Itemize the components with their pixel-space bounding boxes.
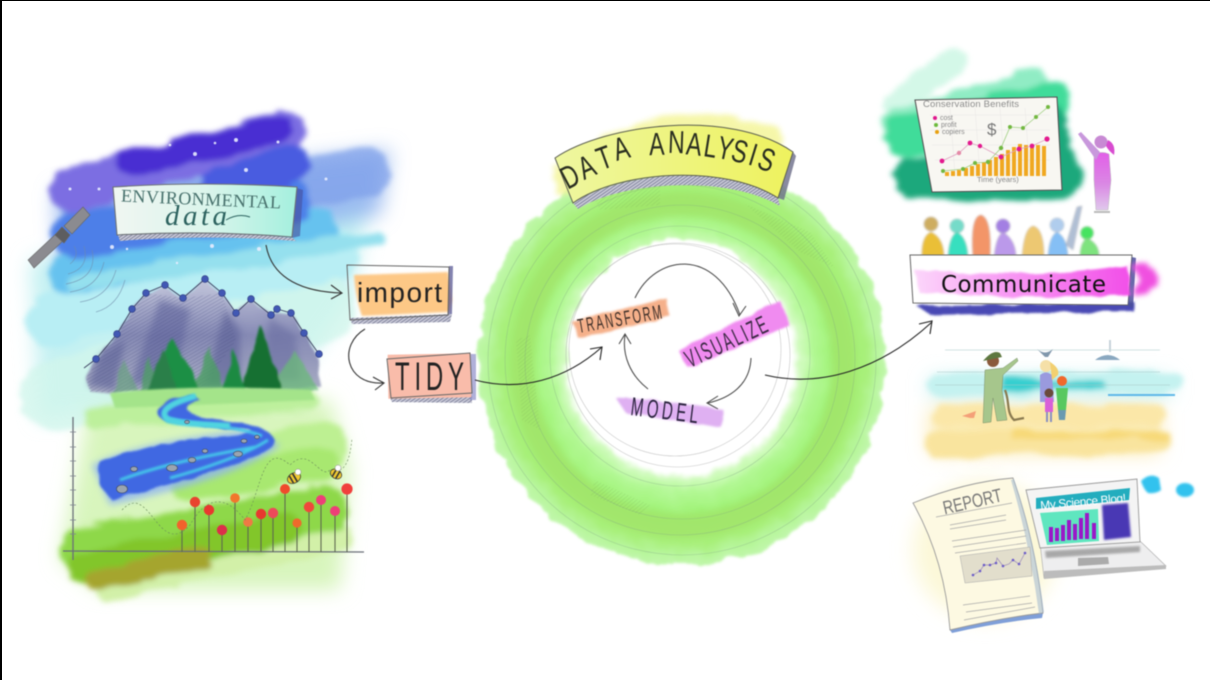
family [1040, 360, 1068, 422]
scene: beach with ranger and family [930, 340, 1175, 453]
banner lettering: A [685, 126, 704, 163]
banner: environmental data [113, 184, 303, 241]
label: model [616, 392, 722, 430]
panel: environmental data [28, 130, 476, 590]
banner: environmental data: data [165, 200, 227, 232]
banner lettering: I [745, 137, 761, 173]
legend [933, 115, 965, 136]
arrow: visualize to communicate [765, 321, 932, 379]
banner: environmental data: ENVIRONMENTAL [121, 186, 281, 213]
icon: twitter birds [1141, 476, 1194, 497]
chart axes with flower lollipop points [63, 417, 364, 560]
banner: communicate: Communicate [941, 272, 1106, 298]
stars [68, 138, 328, 264]
page frame: top edge [0, 0, 1210, 1]
document: report [913, 478, 1044, 633]
banner lettering: D [554, 157, 586, 196]
green watercolor ring [478, 157, 886, 565]
icon: satellite [28, 207, 125, 312]
lines [942, 139, 1047, 161]
label: visualize: VISUALIZE [681, 311, 774, 374]
mountains [84, 276, 322, 408]
cycle arrows [619, 264, 751, 409]
chart slide: conservation benefits: $ [987, 120, 997, 139]
sky and ground watercolor wash [30, 130, 390, 590]
icon: bees [285, 465, 343, 486]
chart slide: conservation benefits: Conservation Benefits [923, 99, 1019, 110]
banner: data analysis [552, 116, 796, 209]
banner: communicate [910, 255, 1158, 315]
presentation wash [895, 60, 1066, 178]
chart slide: conservation benefits [915, 97, 1062, 192]
trees [110, 325, 318, 408]
legend: cost [940, 115, 953, 122]
box: tidy: TIDY [395, 354, 469, 398]
bee flight path [122, 438, 352, 534]
banner lettering: N [667, 124, 685, 160]
icon: audience [922, 206, 1099, 260]
banner lettering: A [609, 129, 634, 168]
label: model: MODEL [629, 392, 703, 430]
banner lettering: A [572, 148, 601, 186]
arrow: data to import [266, 245, 342, 299]
label: transform: TRANSFORM [576, 301, 665, 338]
banner lettering: L [702, 128, 720, 165]
page frame: left edge [0, 0, 2, 680]
report yellow wash [913, 480, 1057, 620]
legend: profit [941, 122, 957, 129]
banner lettering: S [728, 132, 752, 171]
box: import: import [357, 277, 442, 308]
flower stems [182, 489, 347, 552]
legend: copiers [942, 129, 965, 136]
chart slide: conservation benefits: Time (years) [977, 175, 1019, 184]
arrow: import to tidy [349, 329, 384, 390]
panel: data analysis ring [475, 116, 932, 565]
mountain ridge data line [84, 276, 322, 368]
laptop: my science blog [1026, 479, 1166, 579]
arrow: tidy to transform [475, 347, 602, 385]
whale and starfish [962, 340, 1120, 418]
banner lettering: S [753, 140, 780, 179]
box: import [347, 265, 453, 324]
icon: presenter [1078, 132, 1114, 212]
ranger [983, 352, 1024, 423]
document: report: REPORT [941, 485, 1004, 519]
river [92, 395, 280, 505]
banner lettering [554, 124, 780, 196]
laptop: my science blog: My Science Blog! [1040, 491, 1127, 512]
panel: communicate [895, 60, 1194, 633]
banner lettering: A [648, 126, 665, 162]
banner lettering: T [592, 139, 617, 177]
beach water and sand [930, 378, 1173, 453]
banner lettering: Y [714, 129, 736, 167]
flower heads [177, 483, 353, 535]
orange bars [945, 144, 1046, 176]
